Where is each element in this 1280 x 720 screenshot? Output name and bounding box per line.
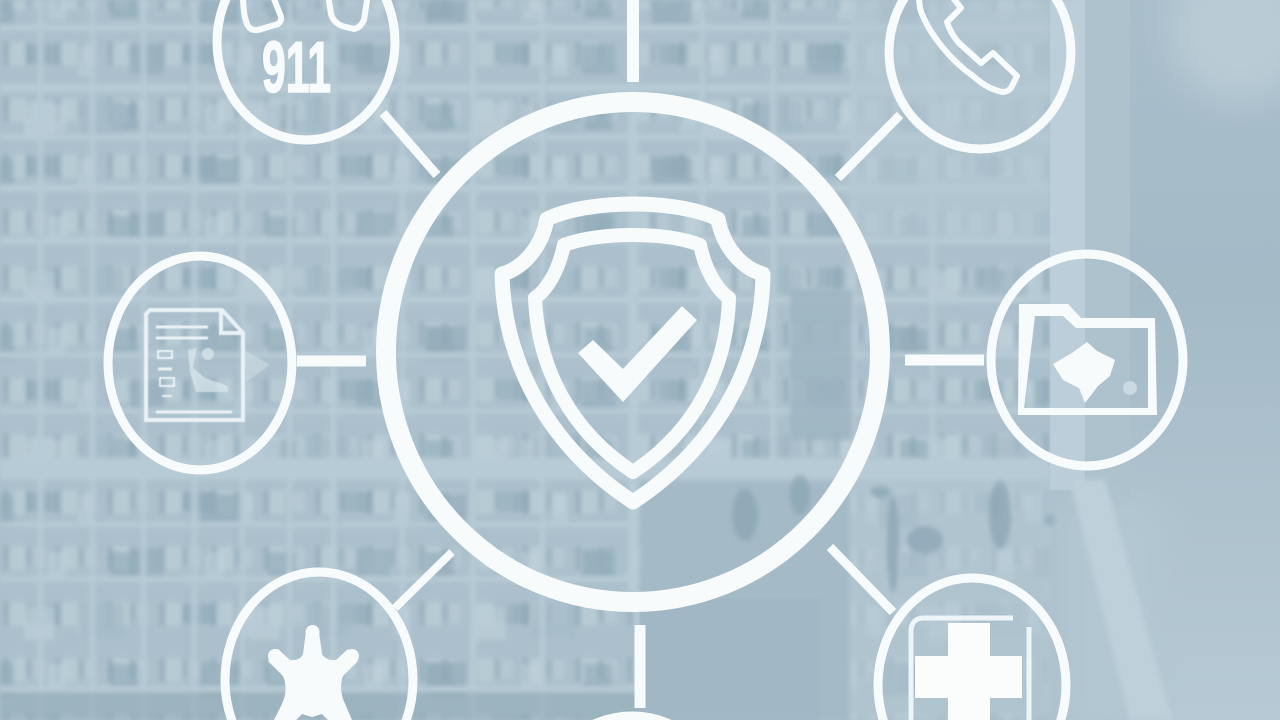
node: sheriff badge <box>225 572 413 720</box>
trees <box>732 475 1056 593</box>
icon: document smudged details <box>188 348 270 392</box>
node: telephone <box>889 0 1071 149</box>
node: bottom circle <box>540 716 724 720</box>
connector lines <box>297 0 984 708</box>
icon: phone receiver ends <box>243 0 368 30</box>
text: 911: 911 <box>262 28 331 108</box>
icon: cross <box>915 623 1022 720</box>
central circle with shield <box>386 102 880 602</box>
icon: check mark <box>578 306 697 402</box>
icon: folder outline <box>1018 304 1157 415</box>
icon: shield outer outline <box>502 204 763 502</box>
right side: shoreline <box>1050 0 1085 490</box>
icon: shield inner outline <box>535 235 729 472</box>
icon: cross frame <box>911 618 1029 720</box>
dark blocks <box>640 598 820 720</box>
icon: folder emblem <box>1053 342 1115 403</box>
node: folder <box>991 254 1183 466</box>
icon: telephone handset <box>919 0 1017 92</box>
node: document <box>108 256 292 470</box>
node: 911 call <box>217 0 395 140</box>
node: medical cross <box>878 578 1066 720</box>
icon: document page <box>146 310 243 420</box>
icon: star badge <box>268 625 359 720</box>
